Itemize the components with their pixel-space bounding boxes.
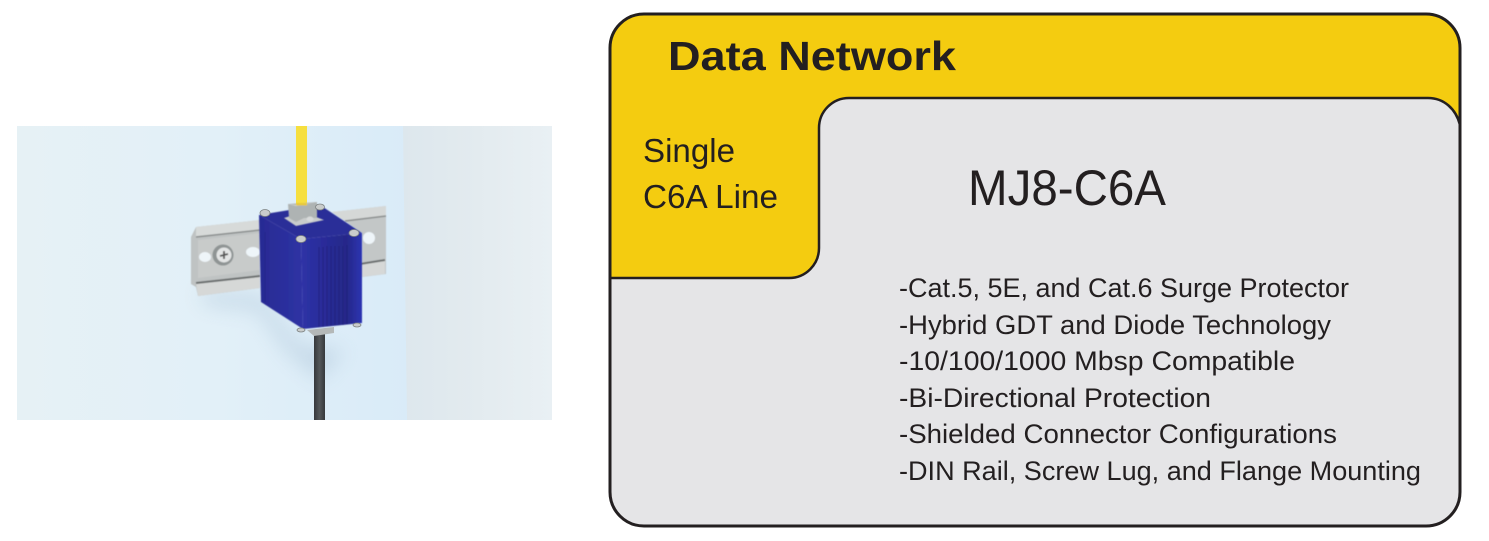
left section <box>190 228 260 292</box>
panel outline <box>610 14 1460 526</box>
panel body <box>610 14 1460 526</box>
black cable <box>314 332 325 420</box>
feature list: -DIN Rail, Screw Lug, and Flange Mounting <box>899 456 1421 486</box>
feature list: -10/100/1000 Mbsp Compatible <box>899 346 1295 376</box>
feature list: -Bi-Directional Protection <box>899 383 1211 413</box>
feature list: -Cat.5, 5E, and Cat.6 Surge Protector <box>899 273 1349 303</box>
rail slots <box>199 252 211 262</box>
photo: surge protector mounted on DIN rail <box>17 126 552 420</box>
feature list: -Shielded Connector Configurations <box>899 419 1337 449</box>
panel: Data Network product card <box>610 14 1460 526</box>
right section <box>346 216 386 277</box>
blue enclosure <box>259 205 362 329</box>
yellow cable <box>296 126 307 206</box>
product name: MJ8-C6A <box>968 160 1167 216</box>
category label: C6A Line <box>643 178 778 215</box>
mounting screw <box>212 244 234 266</box>
feature list: -Hybrid GDT and Diode Technology <box>899 310 1331 340</box>
DIN rail <box>191 206 386 296</box>
wall background <box>17 126 552 420</box>
enclosure screws <box>260 204 361 332</box>
bottom connector <box>307 327 334 336</box>
top connector <box>284 202 324 226</box>
heading: Data Network <box>668 33 956 79</box>
category label <box>643 132 778 215</box>
yellow header tab <box>610 14 1460 278</box>
feature list <box>899 273 1421 486</box>
category label: Single <box>643 132 735 169</box>
tab outline <box>610 98 1460 278</box>
shadow <box>204 290 338 376</box>
